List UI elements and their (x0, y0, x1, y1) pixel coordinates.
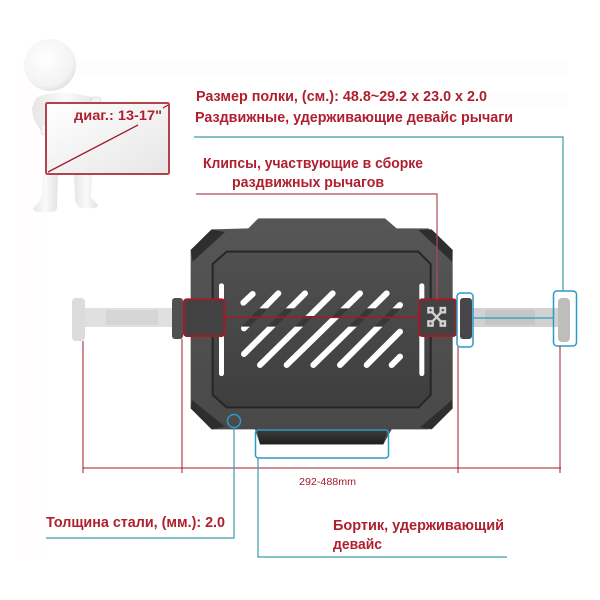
label: retaining lip line one: Бортик, удерживающий (333, 517, 504, 534)
figure: head (24, 39, 76, 91)
figure: right leg (74, 175, 98, 208)
infographic canvas (24, 39, 578, 558)
lip leader (258, 458, 507, 557)
left vertical slot (219, 283, 224, 376)
diagonal size label: диаг.: 13-17" (74, 107, 162, 123)
shelf body (191, 218, 453, 444)
right vertical slot (419, 283, 424, 376)
teal callout: steel thickness (46, 414, 240, 538)
left arm knob (172, 298, 183, 339)
clip connector line (224, 315, 419, 320)
left arm end plate (72, 298, 85, 341)
shelf front lip (257, 430, 387, 444)
thickness leader (46, 428, 234, 538)
figure holding a screen board (24, 39, 169, 212)
right knob marker (457, 293, 473, 347)
arm channel band over slots (242, 308, 401, 327)
heading: clips: Клипсы, участвующие в сборке (203, 155, 423, 172)
heading: shelf size: Размер полки, (см.): 48.8~29.2 x 23.0 x 2.0 (196, 88, 487, 105)
diagonal line (48, 105, 168, 172)
teal callout: sliding arms (194, 137, 576, 347)
heading: sliding arms: Раздвижные, удерживающие девайс рычаги (195, 109, 513, 126)
shelf device (184, 218, 456, 444)
figure: left leg (33, 175, 58, 212)
heading: clips second line: раздвижных рычагов (232, 174, 384, 191)
teal callout: retaining lip (256, 430, 507, 557)
left arm (72, 298, 183, 341)
right arm (460, 298, 570, 342)
right clip highlight (419, 299, 456, 336)
right end plate marker (554, 291, 576, 346)
leader line to right arm (194, 137, 563, 291)
width dimension label: 292-488mm (299, 477, 356, 488)
label: retaining lip line two: девайс (333, 536, 382, 553)
right arm bar (471, 308, 559, 327)
figure: side hand (41, 124, 51, 135)
width dimension line (83, 339, 561, 473)
diagonal vent slots (243, 293, 400, 365)
shelf recessed panel (213, 252, 431, 407)
arm center line (473, 317, 553, 319)
thickness marker circle (228, 414, 240, 428)
right arm end plate (558, 298, 570, 342)
right arm knob (460, 298, 472, 339)
figure: top hand (91, 97, 101, 108)
icon: clip fastening symbol (428, 308, 445, 326)
left arm ribbing (106, 310, 158, 325)
screen board (46, 103, 169, 174)
left arm bar (83, 308, 173, 327)
shelf corner pads (191, 229, 453, 429)
left clip highlight (184, 299, 224, 336)
lip marker (256, 430, 388, 458)
label: steel thickness: Толщина стали, (мм.): 2.0 (46, 514, 225, 531)
red callout: clips leader (196, 194, 437, 299)
right arm ribbing (485, 310, 535, 325)
figure: torso and arms (32, 93, 100, 134)
